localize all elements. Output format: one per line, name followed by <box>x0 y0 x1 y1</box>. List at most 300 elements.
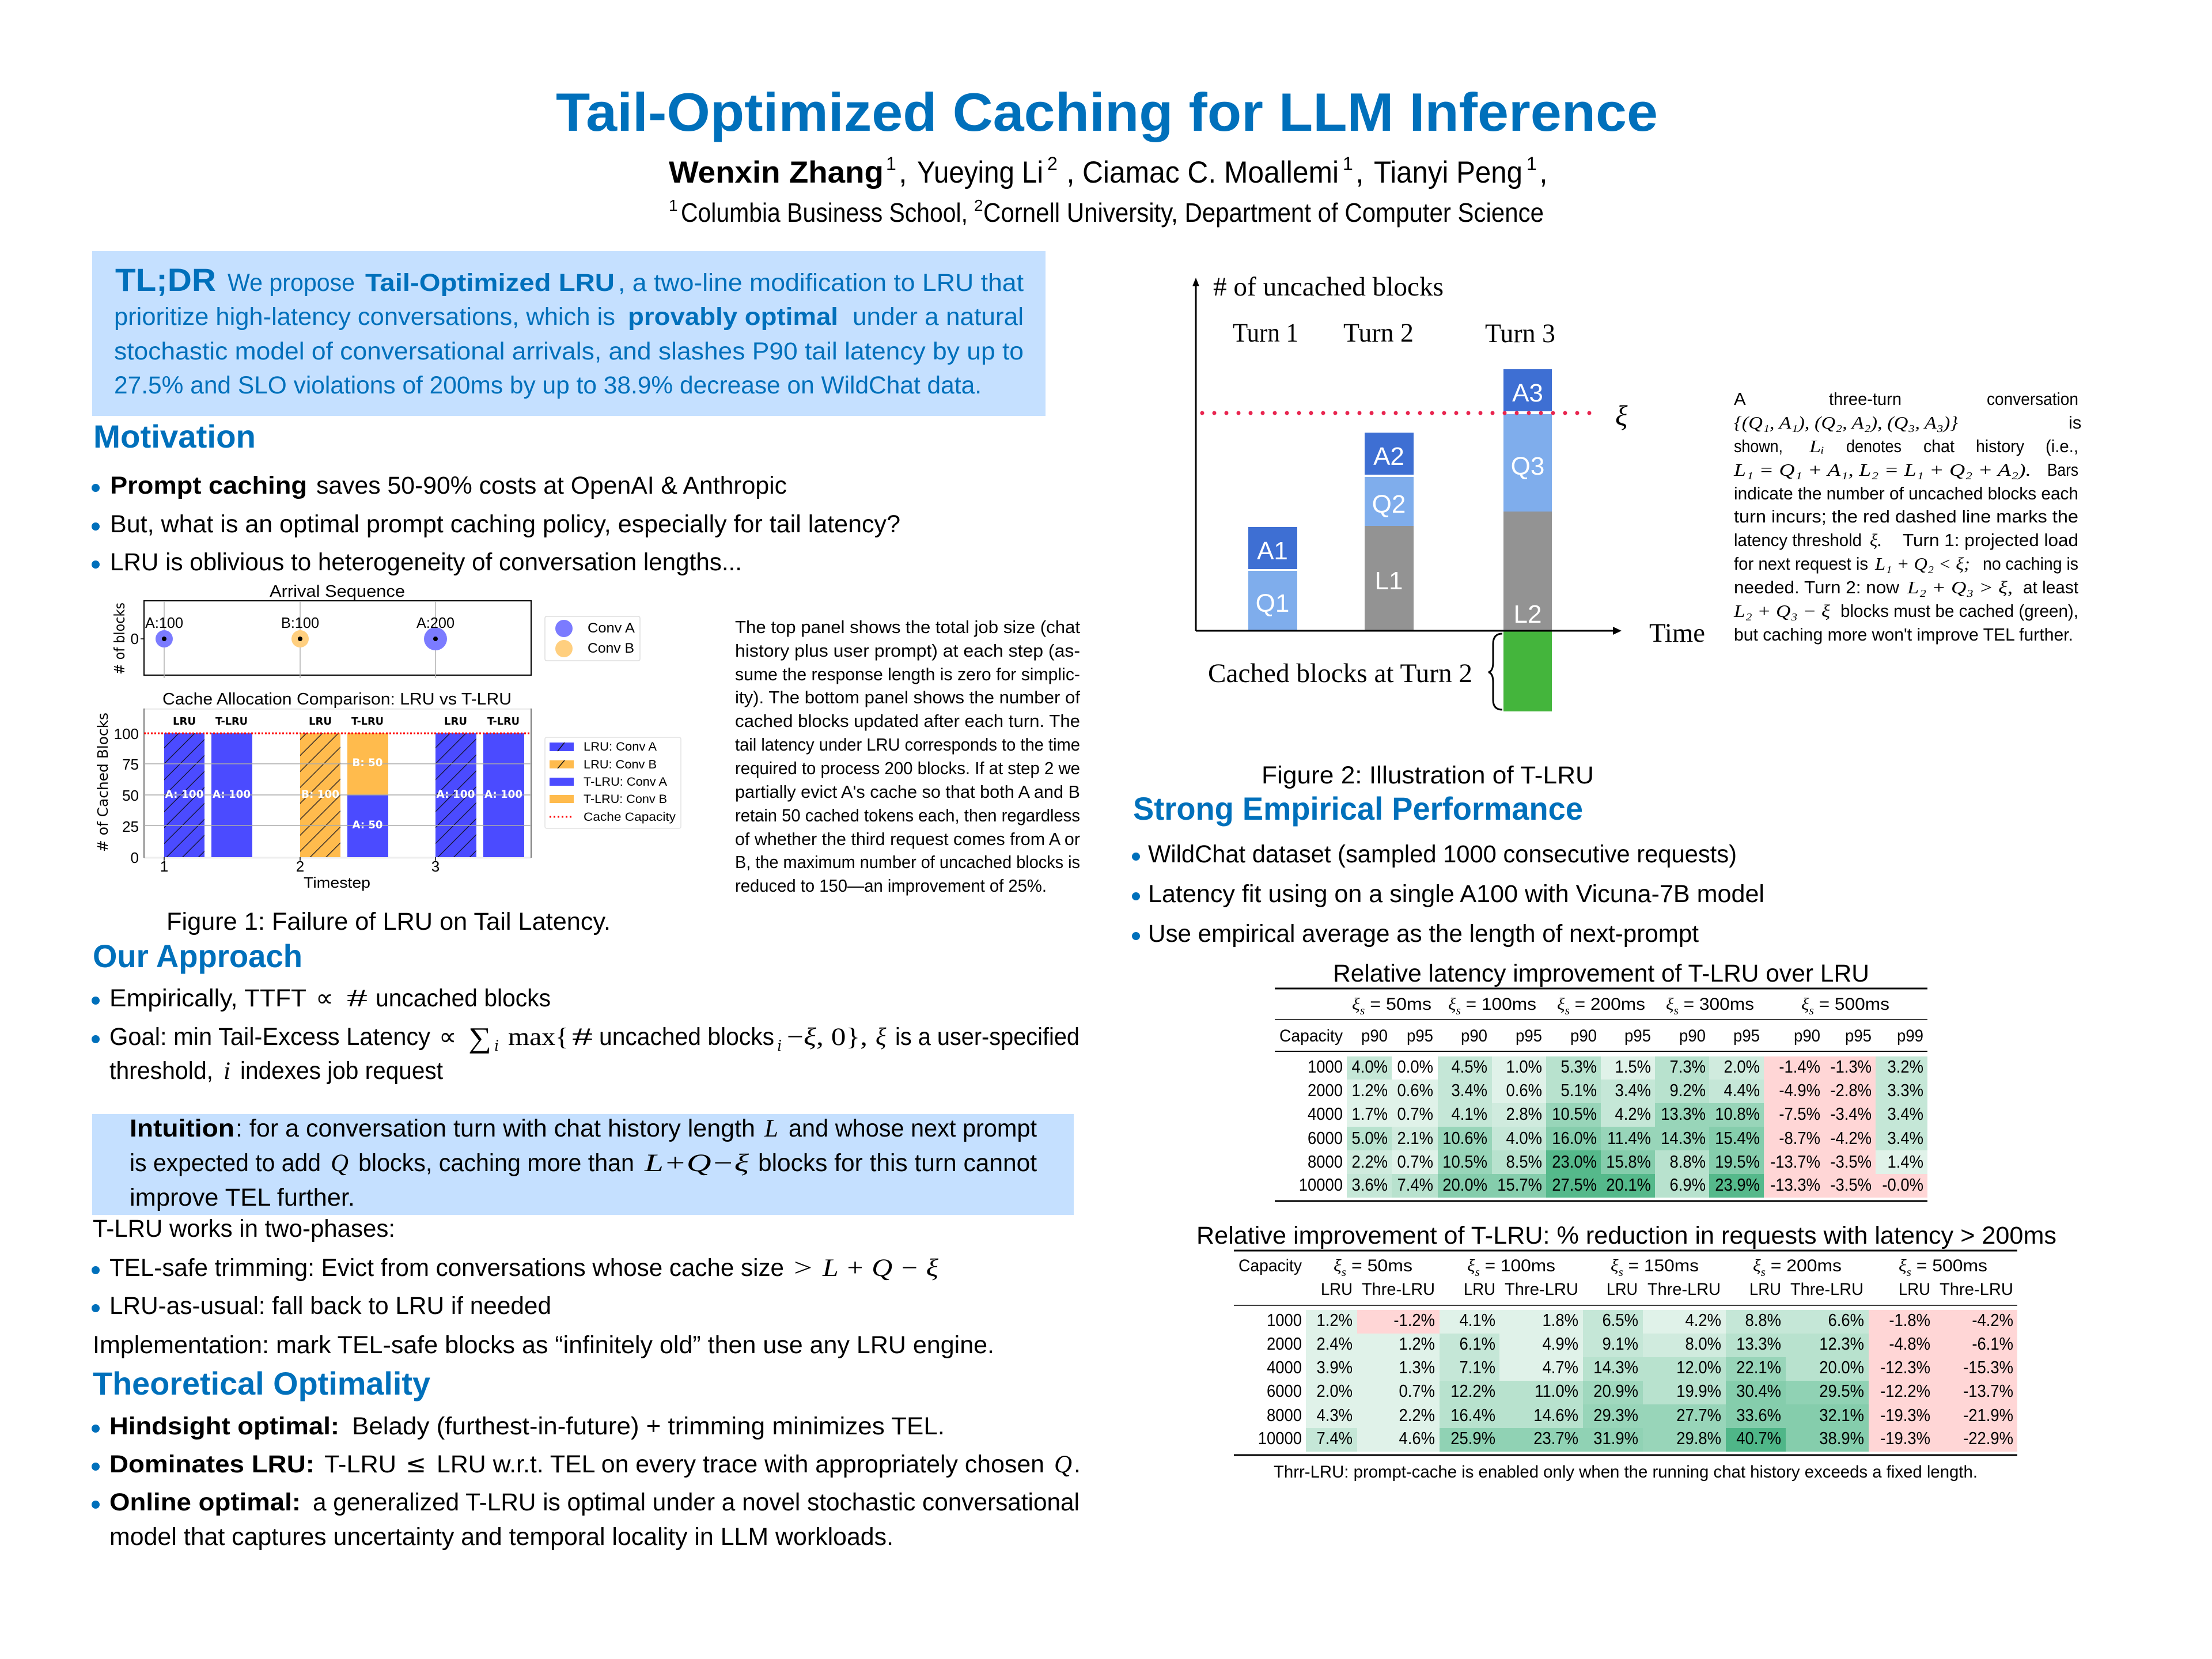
motivation bullets: Prompt caching <box>110 472 307 499</box>
legend: Cache Capacity <box>584 810 676 824</box>
table 2 values: 2.4% <box>1316 1335 1353 1354</box>
table 2 values: 4.9% <box>1542 1335 1578 1354</box>
table 2 header: LRU <box>1464 1280 1495 1299</box>
table 2 values: 20.9% <box>1593 1382 1638 1401</box>
table 1 header: ξ <box>1801 995 1809 1014</box>
figure 2 side note: blocks must be cached (green), <box>1840 601 2078 621</box>
figure 1 side note: reduced to 150—an improvement of 25%. <box>735 876 1047 896</box>
figure 1 side note <box>735 617 1080 896</box>
table 2 header: s <box>1761 1266 1766 1279</box>
axes <box>1192 278 1622 635</box>
table 2 values: 12.2% <box>1450 1382 1495 1401</box>
table 2: reduction in requests over 200ms <box>1196 1222 2056 1455</box>
figure 2 side note: L₂ + Q₃ > ξ, <box>1907 577 2013 597</box>
heading: Theoretical Optimality: Theoretical Optimality <box>93 1365 430 1402</box>
panel: TL;DR callout: under a natural <box>853 303 1024 331</box>
table 2 header <box>1238 1256 2013 1299</box>
figure 2 side note <box>1733 389 2081 645</box>
table 1 values: 3.4% <box>1615 1081 1651 1100</box>
T-LRU phases text: Implementation: mark TEL-safe blocks as “infinitely old” then use any LRU engine. <box>93 1331 994 1359</box>
panel: intuition callout: L <box>764 1115 778 1142</box>
figure 1 side note: of whether the third request comes from A or <box>735 829 1080 849</box>
T-LRU phases text: > <box>794 1255 812 1282</box>
T-LRU phases text: T-LRU works in two-phases: <box>93 1215 395 1243</box>
figure 2 side note: three-turn <box>1829 389 1902 409</box>
table 2 header: ξ <box>1611 1256 1619 1275</box>
table 2 values: 4.3% <box>1316 1406 1353 1425</box>
figure 2 side note: indicate the number of uncached blocks each <box>1734 483 2078 503</box>
table 2 values: 23.7% <box>1533 1429 1578 1448</box>
table 1 header: p95 <box>1733 1027 1760 1046</box>
figure 2 side note: needed. Turn 2: now <box>1734 577 1900 597</box>
table 2 values: 22.1% <box>1736 1358 1781 1377</box>
table 2 values: 38.9% <box>1819 1429 1864 1448</box>
table 2 values: 6000 <box>1267 1382 1302 1401</box>
table 2 header: s <box>1342 1266 1346 1279</box>
table 1 values: 3.4% <box>1451 1081 1487 1100</box>
table 1 values: -13.3% <box>1770 1176 1820 1195</box>
table 2 values: 12.3% <box>1819 1335 1864 1354</box>
approach bullets: −ξ, 0}, <box>787 1024 868 1051</box>
table 1 values: 16.0% <box>1552 1129 1597 1148</box>
chart: arrival sequence: 0 <box>131 630 139 647</box>
authors: , <box>899 156 907 190</box>
motivation bullets: But, what is an optimal prompt caching policy, especially for tail latency? <box>110 510 900 538</box>
figure 2 side note: L₂ + Q₃ − ξ <box>1733 601 1831 621</box>
motivation bullets <box>92 472 900 576</box>
table 1 values: 4.2% <box>1615 1105 1651 1124</box>
T-LRU phases text: L + Q − ξ <box>822 1255 939 1282</box>
table 2 values: 40.7% <box>1736 1429 1781 1448</box>
authors: Ciamac C. Moallemi <box>1082 156 1339 190</box>
table 2 header: = 100ms <box>1480 1256 1555 1275</box>
table 2 values: 0.7% <box>1399 1382 1435 1401</box>
table 1 values: 0.7% <box>1397 1153 1433 1172</box>
table 1 values: 6000 <box>1308 1129 1343 1148</box>
table 1 values: 5.1% <box>1560 1081 1597 1100</box>
table 1 header: = 100ms <box>1461 995 1536 1014</box>
figure 1 side note: sume the response length is zero for simplic- <box>735 664 1080 684</box>
table 1 values: -1.3% <box>1830 1058 1872 1077</box>
T-LRU phases text <box>92 1215 994 1359</box>
chart: cache allocation comparison: 25 <box>122 818 139 835</box>
table 1 values: 23.0% <box>1552 1153 1597 1172</box>
table 1 values: 5.0% <box>1351 1129 1388 1148</box>
legend: LRU: Conv B <box>584 758 657 771</box>
table 1 header: p90 <box>1570 1027 1597 1046</box>
optimality bullets: Belady (furthest-in-future) + trimming minimizes TEL. <box>352 1412 945 1440</box>
table 1 values: 14.3% <box>1661 1129 1706 1148</box>
table 1 values: 1.0% <box>1506 1058 1542 1077</box>
table 1 values: 5.3% <box>1560 1058 1597 1077</box>
figure 2 side note: shown, <box>1734 436 1783 456</box>
table 2 values: 1.2% <box>1316 1311 1353 1330</box>
figure 2 side note: for next request is <box>1734 554 1868 574</box>
table 1 values: 4.4% <box>1724 1081 1760 1100</box>
table 1 values: 15.8% <box>1606 1153 1651 1172</box>
table 2 header: LRU <box>1321 1280 1353 1299</box>
figure 2 side note: chat <box>1923 436 1955 456</box>
table 1 values: 0.7% <box>1397 1105 1433 1124</box>
authors: , <box>1355 156 1364 190</box>
table 1 values: -2.8% <box>1830 1081 1872 1100</box>
table 1 values: 0.0% <box>1397 1058 1433 1077</box>
authors: 1 <box>1527 153 1537 174</box>
panel: intuition callout <box>92 1114 1074 1215</box>
motivation bullets: saves 50-90% costs at OpenAI & Anthropic <box>316 472 787 499</box>
table 1 values: -8.7% <box>1779 1129 1820 1148</box>
table 1 header: p90 <box>1361 1027 1388 1046</box>
table 1 values: 10.5% <box>1552 1105 1597 1124</box>
table 1 header: = 500ms <box>1814 995 1889 1014</box>
table 1 values: 8000 <box>1308 1153 1343 1172</box>
turn 3 bar: Q3 <box>1511 452 1544 480</box>
table 2 values: 6.1% <box>1459 1335 1495 1354</box>
T-LRU phases text: TEL-safe trimming: Evict from conversations whose cache size <box>109 1254 784 1282</box>
table 1 values: 0.6% <box>1397 1081 1433 1100</box>
table 2 heat cells <box>1306 1310 2017 1452</box>
table 2 header: ξ <box>1753 1256 1761 1275</box>
empirical bullets <box>1132 840 1764 948</box>
table 2 values: 27.7% <box>1676 1406 1721 1425</box>
table 2 header: LRU <box>1749 1280 1781 1299</box>
panel: TL;DR callout <box>92 251 1046 416</box>
figure 2 side note: L₁ + Q₂ < ξ; <box>1874 554 1970 574</box>
table 1 header: p90 <box>1679 1027 1706 1046</box>
table 1 values: 3.3% <box>1887 1081 1923 1100</box>
approach bullets: threshold, <box>109 1057 213 1085</box>
table 2 values: 7.1% <box>1459 1358 1495 1377</box>
figure 1 side note: partially evict A's cache so that both A and B <box>735 782 1080 802</box>
table 2 values: 4.6% <box>1399 1429 1435 1448</box>
figure 1 side note: required to process 200 blocks. If at step 2 we <box>735 758 1080 778</box>
motivation bullets: LRU is oblivious to heterogeneity of conversation lengths... <box>110 548 742 576</box>
figure 2 side note: Lᵢ <box>1809 436 1824 456</box>
turn 2 bar: L1 <box>1375 567 1403 595</box>
chart: cache allocation comparison: LRU <box>444 715 467 728</box>
table 1 values: 4.0% <box>1351 1058 1388 1077</box>
chart: cache allocation comparison: 0 <box>131 849 139 866</box>
panel: TL;DR callout: prioritize high-latency conversations, which is <box>114 303 615 331</box>
table 2 values: 1000 <box>1267 1311 1302 1330</box>
table 1 header: p95 <box>1624 1027 1651 1046</box>
figure 2 side note: Bars <box>2047 460 2078 480</box>
table 2 values: -19.3% <box>1880 1429 1930 1448</box>
panel: intuition callout: improve TEL further. <box>130 1184 355 1211</box>
approach bullets: indexes job request <box>240 1057 443 1085</box>
table 1 header: ξ <box>1352 995 1360 1014</box>
optimality bullets: Dominates LRU: <box>109 1450 315 1478</box>
table 1 header: = 50ms <box>1365 995 1431 1014</box>
chart: cache allocation comparison: 50 <box>122 787 139 804</box>
authors: , <box>1539 156 1548 190</box>
chart: cache allocation comparison: A: 100 <box>165 788 204 801</box>
chart: cache allocation comparison: 3 <box>431 858 440 875</box>
table 2 values: 9.1% <box>1602 1335 1638 1354</box>
chart: cache allocation comparison: 75 <box>122 756 139 773</box>
panel: TL;DR callout: provably optimal <box>628 303 838 331</box>
table 1 values: 1.5% <box>1615 1058 1651 1077</box>
table 2 values: 8000 <box>1267 1406 1302 1425</box>
table 1 values: -7.5% <box>1779 1105 1820 1124</box>
figure 2 caption: Figure 2: Illustration of T-LRU <box>1262 762 1594 789</box>
table 1 values: 8.8% <box>1669 1153 1706 1172</box>
table 2 values: -6.1% <box>1972 1335 2013 1354</box>
table 1 heat cells <box>1347 1056 1927 1198</box>
table 2 values: 33.6% <box>1736 1406 1781 1425</box>
table 1 values: 10.8% <box>1715 1105 1760 1124</box>
table 2 header: Thre-LRU <box>1647 1280 1721 1299</box>
empirical bullets: Latency fit using on a single A100 with Vicuna-7B model <box>1148 880 1764 908</box>
approach bullets: max{ <box>508 1024 569 1051</box>
panel: intuition callout: blocks for this turn cannot <box>758 1149 1037 1177</box>
turn 2 bar <box>1365 433 1414 631</box>
table 2 values: -19.3% <box>1880 1406 1930 1425</box>
table 1 values: 3.2% <box>1887 1058 1923 1077</box>
table 2 values: -22.9% <box>1963 1429 2013 1448</box>
approach bullets <box>92 984 1080 1085</box>
chart: cache allocation comparison: A: 50 <box>353 819 382 831</box>
table 1 header: p95 <box>1845 1027 1872 1046</box>
approach bullets: # <box>572 1024 593 1051</box>
optimality bullets: T-LRU <box>324 1450 396 1478</box>
table 1 values: 7.3% <box>1669 1058 1706 1077</box>
table 1 values: 2.1% <box>1397 1129 1433 1148</box>
table 1 header <box>1279 995 1923 1046</box>
table 1 values: 4.1% <box>1451 1105 1487 1124</box>
table 2 footnote: Thrr-LRU: prompt-cache is enabled only when the running chat history exceeds a fixed length. <box>1274 1463 1978 1482</box>
chart: arrival sequence <box>111 582 640 678</box>
table 1 values: 2.8% <box>1506 1105 1542 1124</box>
heading: Motivation: Motivation <box>93 418 256 454</box>
authors: Wenxin Zhang <box>669 156 884 190</box>
table 2 values: 29.8% <box>1676 1429 1721 1448</box>
approach bullets: i <box>777 1037 782 1055</box>
table 2 values: 29.3% <box>1593 1406 1638 1425</box>
table 2 values: -1.2% <box>1393 1311 1435 1330</box>
chart: cache allocation comparison: A: 100 <box>437 788 475 801</box>
chart: arrival sequence: Conv A <box>588 620 635 636</box>
chart: arrival sequence: Arrival Sequence <box>270 582 405 601</box>
table 1 values: 4000 <box>1308 1105 1343 1124</box>
table 1 values: 10000 <box>1299 1176 1343 1195</box>
approach bullets: uncached blocks <box>376 984 551 1012</box>
figure 2: T-LRU stacked bar illustration: Turn 3 <box>1485 319 1555 349</box>
table 2 header: Thre-LRU <box>1790 1280 1863 1299</box>
figure 2 side note: but caching more won't improve TEL further. <box>1734 624 2073 645</box>
panel: TL;DR callout: TL;DR <box>115 262 216 298</box>
table 1 values: 20.0% <box>1442 1176 1487 1195</box>
table 2 values: 2000 <box>1267 1335 1302 1354</box>
figure 1 side note: cached blocks updated after each turn. The <box>735 711 1080 731</box>
table 2 values: 31.9% <box>1593 1429 1638 1448</box>
table 2 values: 11.0% <box>1535 1382 1578 1401</box>
chart: cache allocation comparison: 1 <box>160 858 168 875</box>
table 1 values: 3.4% <box>1887 1105 1923 1124</box>
table 2 values: 1.3% <box>1399 1358 1435 1377</box>
table 2 header: = 150ms <box>1623 1256 1699 1275</box>
table 1 values: 2.0% <box>1724 1058 1760 1077</box>
approach bullets: Empirically, TTFT <box>109 984 306 1012</box>
figure 2: T-LRU stacked bar illustration: Time <box>1649 618 1705 648</box>
turn 1 bar <box>1248 527 1297 631</box>
table 2 values: 10000 <box>1258 1429 1302 1448</box>
table 2 values: -12.2% <box>1880 1382 1930 1401</box>
table 1 values: 27.5% <box>1552 1176 1597 1195</box>
chart: cache allocation comparison: A: 100 <box>213 788 251 801</box>
chart: arrival sequence: # of blocks <box>111 603 128 675</box>
table 1 values: 13.3% <box>1661 1105 1706 1124</box>
turn 3 bar <box>1503 369 1552 711</box>
turn 3 bar: A3 <box>1512 379 1543 407</box>
table 1 header: s <box>1809 1005 1814 1017</box>
table 1 header: p90 <box>1461 1027 1487 1046</box>
table 1 values: 10.6% <box>1442 1129 1487 1148</box>
turn 3 bar: L2 <box>1514 600 1541 628</box>
table 2 values: 4.1% <box>1459 1311 1495 1330</box>
chart: arrival sequence: A:200 <box>416 614 454 631</box>
table 2 values: -12.3% <box>1880 1358 1930 1377</box>
optimality bullets: a generalized T-LRU is optimal under a novel stochastic conversational <box>313 1488 1080 1516</box>
T-LRU phases text: LRU-as-usual: fall back to LRU if needed <box>109 1292 551 1320</box>
figure 1 caption: Figure 1: Failure of LRU on Tail Latency. <box>166 908 611 935</box>
table 2 header: Thre-LRU <box>1362 1280 1435 1299</box>
approach bullets: i <box>494 1037 499 1055</box>
panel: TL;DR callout: , a two-line modification to LRU that <box>618 269 1024 297</box>
affiliations: 1 <box>669 196 678 214</box>
table 1 header: = 300ms <box>1679 995 1754 1014</box>
turn 2 bar: Q2 <box>1372 490 1406 518</box>
turn 2 bar: A2 <box>1373 442 1404 471</box>
table 1 values: 0.6% <box>1506 1081 1542 1100</box>
table 1 header: = 200ms <box>1570 995 1645 1014</box>
table 2 values: 4000 <box>1267 1358 1302 1377</box>
panel: TL;DR callout: stochastic model of conversational arrivals, and slashes P90 tail latency by up to <box>114 338 1024 365</box>
figure 1 side note: retain 50 cached tokens each, then regardless <box>735 805 1080 825</box>
chart: arrival sequence: A:100 <box>145 614 183 631</box>
table 2 values: 20.0% <box>1819 1358 1864 1377</box>
figure 2 side note: conversation <box>1987 389 2078 409</box>
table 2 values: -13.7% <box>1963 1382 2013 1401</box>
approach bullets: is a user-specified <box>895 1023 1080 1051</box>
table 1 header: s <box>1674 1005 1679 1017</box>
optimality bullets: Hindsight optimal: <box>109 1412 339 1440</box>
table 1 header: ξ <box>1557 995 1565 1014</box>
table 1 values: 3.6% <box>1351 1176 1388 1195</box>
panel: intuition callout: and whose next prompt <box>789 1115 1037 1142</box>
table 1 values: 10.5% <box>1442 1153 1487 1172</box>
optimality bullets: Online optimal: <box>109 1488 301 1516</box>
chart: arrival sequence: Conv B <box>588 641 634 656</box>
table 1 values: 11.4% <box>1607 1129 1651 1148</box>
table 2 values: 1.2% <box>1399 1335 1435 1354</box>
empirical bullets: Use empirical average as the length of next-prompt <box>1148 920 1699 948</box>
table 1 values: 23.9% <box>1715 1176 1760 1195</box>
heading: Our Approach: Our Approach <box>93 938 302 974</box>
panel: intuition callout: : for a conversation turn with chat history length <box>236 1115 755 1142</box>
table 1 values: -4.9% <box>1779 1081 1820 1100</box>
table 1 values: 3.4% <box>1887 1129 1923 1148</box>
table 1 values: -3.5% <box>1830 1153 1872 1172</box>
table 2 header: Capacity <box>1238 1256 1302 1275</box>
figure 2 side note: {(Q₁, A₁), (Q₂, A₂), (Q₃, A₃)} <box>1734 412 1959 433</box>
table 2 values: 32.1% <box>1819 1406 1864 1425</box>
authors: 2 <box>1047 153 1058 174</box>
table 1 values: 9.2% <box>1669 1081 1706 1100</box>
table 1 values: 4.0% <box>1506 1129 1542 1148</box>
table 2 values: 2.2% <box>1399 1406 1435 1425</box>
approach bullets: ∝ <box>316 984 334 1013</box>
approach bullets: # <box>347 985 368 1012</box>
table 2 header: = 50ms <box>1346 1256 1412 1275</box>
chart: cache allocation comparison: LRU <box>173 715 196 728</box>
chart: cache allocation comparison: T-LRU <box>487 715 520 728</box>
table 1 values: -13.7% <box>1770 1153 1820 1172</box>
table 2 header: s <box>1475 1266 1480 1279</box>
table 2 values: 8.8% <box>1745 1311 1781 1330</box>
table 1 header: s <box>1565 1005 1570 1017</box>
table 1 values: -4.2% <box>1830 1129 1872 1148</box>
panel: TL;DR callout: 27.5% and SLO violations of 200ms by up to 38.9% decrease on WildChat data. <box>114 372 982 399</box>
optimality bullets: ≤ <box>406 1450 426 1479</box>
optimality bullets <box>92 1412 1081 1551</box>
figure 1 side note: tail latency under LRU corresponds to the time <box>735 734 1080 755</box>
chart: cache allocation comparison: T-LRU <box>351 715 384 728</box>
table 2 header: Thre-LRU <box>1505 1280 1578 1299</box>
figure 1 side note: ity). The bottom panel shows the number of <box>735 687 1080 707</box>
optimality bullets: Q <box>1054 1451 1072 1478</box>
chart: cache allocation comparison: Cache Allocation Comparison: LRU vs T-LRU <box>162 690 512 709</box>
approach bullets: ∝ <box>439 1022 457 1051</box>
figure 2: T-LRU stacked bar illustration: Turn 2 <box>1343 318 1414 348</box>
table 2 values: 2.0% <box>1316 1382 1353 1401</box>
table 2 values: 25.9% <box>1450 1429 1495 1448</box>
approach bullets: ∑ <box>468 1021 491 1054</box>
authors: 1 <box>886 153 896 174</box>
legend: T-LRU: Conv B <box>584 793 667 806</box>
legend: LRU: Conv A <box>584 740 657 753</box>
table 1 values: 1.4% <box>1887 1153 1923 1172</box>
table 2 values: 29.5% <box>1819 1382 1864 1401</box>
table 1: relative latency improvement: Relative latency improvement of T-LRU over LRU <box>1333 960 1869 987</box>
table 2 values: 13.3% <box>1736 1335 1781 1354</box>
table 1 values: -0.0% <box>1882 1176 1923 1195</box>
optimality bullets: model that captures uncertainty and temporal locality in LLM workloads. <box>109 1523 893 1551</box>
approach bullets: Goal: min Tail-Excess Latency <box>109 1023 430 1051</box>
figure 2 side note: A <box>1734 389 1746 409</box>
figure 2 side note: (i.e., <box>2046 436 2078 456</box>
chart: cache allocation comparison: B: 100 <box>301 788 339 801</box>
legend: T-LRU: Conv A <box>584 775 667 789</box>
heading: Strong Empirical Performance: Strong Empirical Performance <box>1133 790 1583 827</box>
table 1 values: 20.1% <box>1606 1176 1651 1195</box>
table 2 values: 16.4% <box>1450 1406 1495 1425</box>
table 1 header: p99 <box>1897 1027 1923 1046</box>
table 1 values: 8.5% <box>1506 1153 1542 1172</box>
table 2 values: 30.4% <box>1736 1382 1781 1401</box>
figure 2 side note: no caching is <box>1983 554 2078 574</box>
table 2 values: 19.9% <box>1676 1382 1721 1401</box>
panel: TL;DR callout: We propose <box>228 269 355 297</box>
chart: cache allocation comparison <box>94 690 681 891</box>
table 1 values: 7.4% <box>1397 1176 1433 1195</box>
affiliations: Cornell University, Department of Computer Science <box>983 198 1544 228</box>
authors: Yueying Li <box>917 156 1043 190</box>
table 2 values: 14.6% <box>1533 1406 1578 1425</box>
authors: , <box>1066 156 1075 190</box>
figure 2 side note: latency threshold <box>1734 530 1862 550</box>
affiliations <box>669 196 1544 228</box>
